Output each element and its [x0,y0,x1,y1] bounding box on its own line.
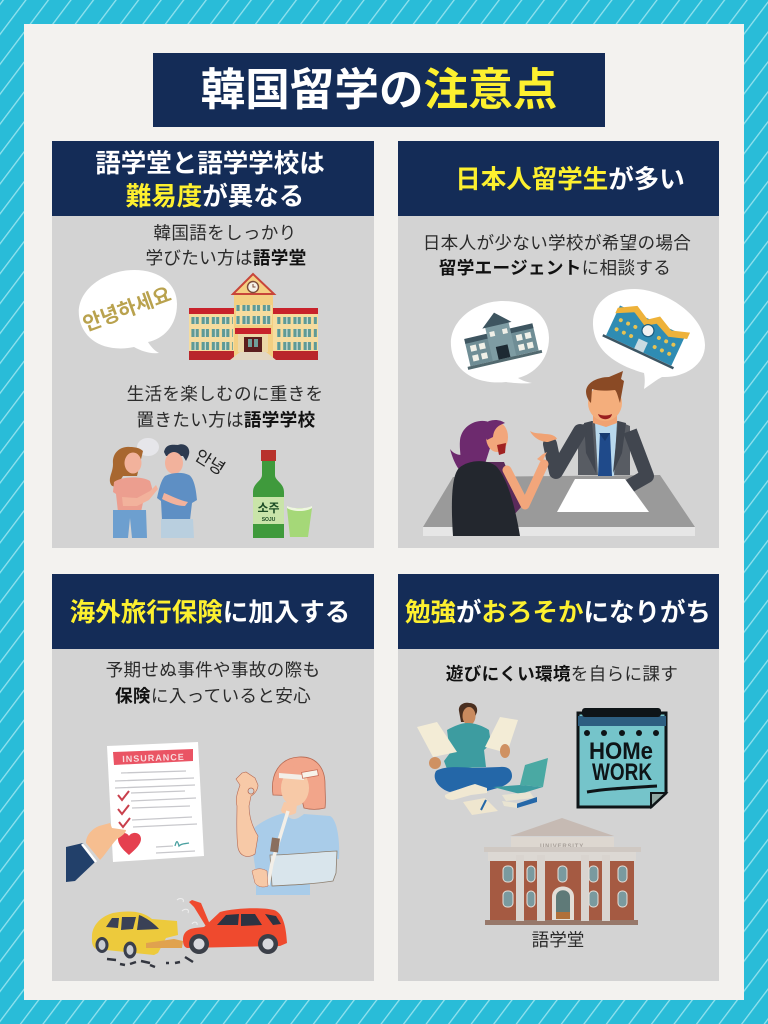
woman [460,421,498,471]
panel heading [398,141,719,216]
panel heading: 勉強がおろそかになりがち [405,598,711,627]
caption: language institute: 語学堂 [532,930,584,950]
text: for enjoying life: 生活を楽しむのに重きを [127,384,323,404]
illustration: insurance document in hand: INSURANCE [122,752,185,764]
panel heading [52,141,374,216]
text: consult an agent: 日本人が少ない学校が希望の場合 [423,233,691,253]
icon: soju bottle and glass: SOJU [262,517,276,523]
icon: homework notepad [578,708,666,807]
paper [557,479,649,512]
text: for enjoying life [127,384,323,430]
blue crossed legs [435,767,512,793]
panel heading [398,574,719,649]
feet on floor [445,784,487,800]
illustration: student studying with laptop [417,703,548,815]
text: annyeong: 안녕 [191,446,228,479]
panel: language school difficulty [52,141,374,548]
illustration: consultation at a desk [423,371,695,536]
icon: university building [484,818,641,925]
text: for serious learners: 韓国語をしっかり [153,223,297,243]
text: insurance gives peace of mind: 予期せぬ事件や事故の際も [106,660,320,680]
text: for serious learners [145,223,307,268]
icon: homework notepad: HOMe [589,738,653,765]
panel heading: 海外旅行保険に加入する [70,599,350,627]
text: for serious learners: 学びたい方は語学堂 [145,248,307,268]
panel heading: 日本人留学生が多い [455,165,685,194]
text: consult an agent [423,233,691,278]
illustration: insurance document in hand [66,742,204,882]
text: create a no-play environment: 遊びにくい環境を自らに課す [446,664,678,684]
panel: many Japanese students [398,141,719,548]
man [578,421,630,475]
text: for enjoying life: 置きたい方は語学学校 [137,410,316,430]
illustration: car collision [92,899,287,967]
panel heading: 難易度が異なる [126,182,304,211]
title [153,53,605,127]
icon: soju bottle and glass [253,450,312,538]
speech bubble with blue school [593,289,705,389]
icon: university building: UNIVERSITY [540,844,584,850]
speech bubble with grey school [451,301,549,383]
icon: homework notepad: WORK [592,759,653,786]
illustration: injured woman with sling [236,757,339,895]
panel heading: 語学堂と語学学校は [95,150,325,178]
illustration: two people chatting [110,438,197,538]
laptop on books [520,758,548,787]
speech bubble: annyeonghaseyo: 안녕하세요 [80,283,174,336]
text: insurance gives peace of mind [106,660,320,706]
icon: school building [189,274,318,360]
speech bubble: annyeonghaseyo [79,270,177,353]
text: consult an agent: 留学エージェントに相談する [439,258,671,278]
icon: soju bottle and glass: 소주 [257,501,280,515]
text: insurance gives peace of mind: 保険に入っていると安心 [115,686,311,706]
panel: travel insurance [52,574,374,981]
title: 韓国留学の注意点 [201,66,557,115]
panel: studies get neglected [398,574,719,981]
panel heading [52,574,374,649]
